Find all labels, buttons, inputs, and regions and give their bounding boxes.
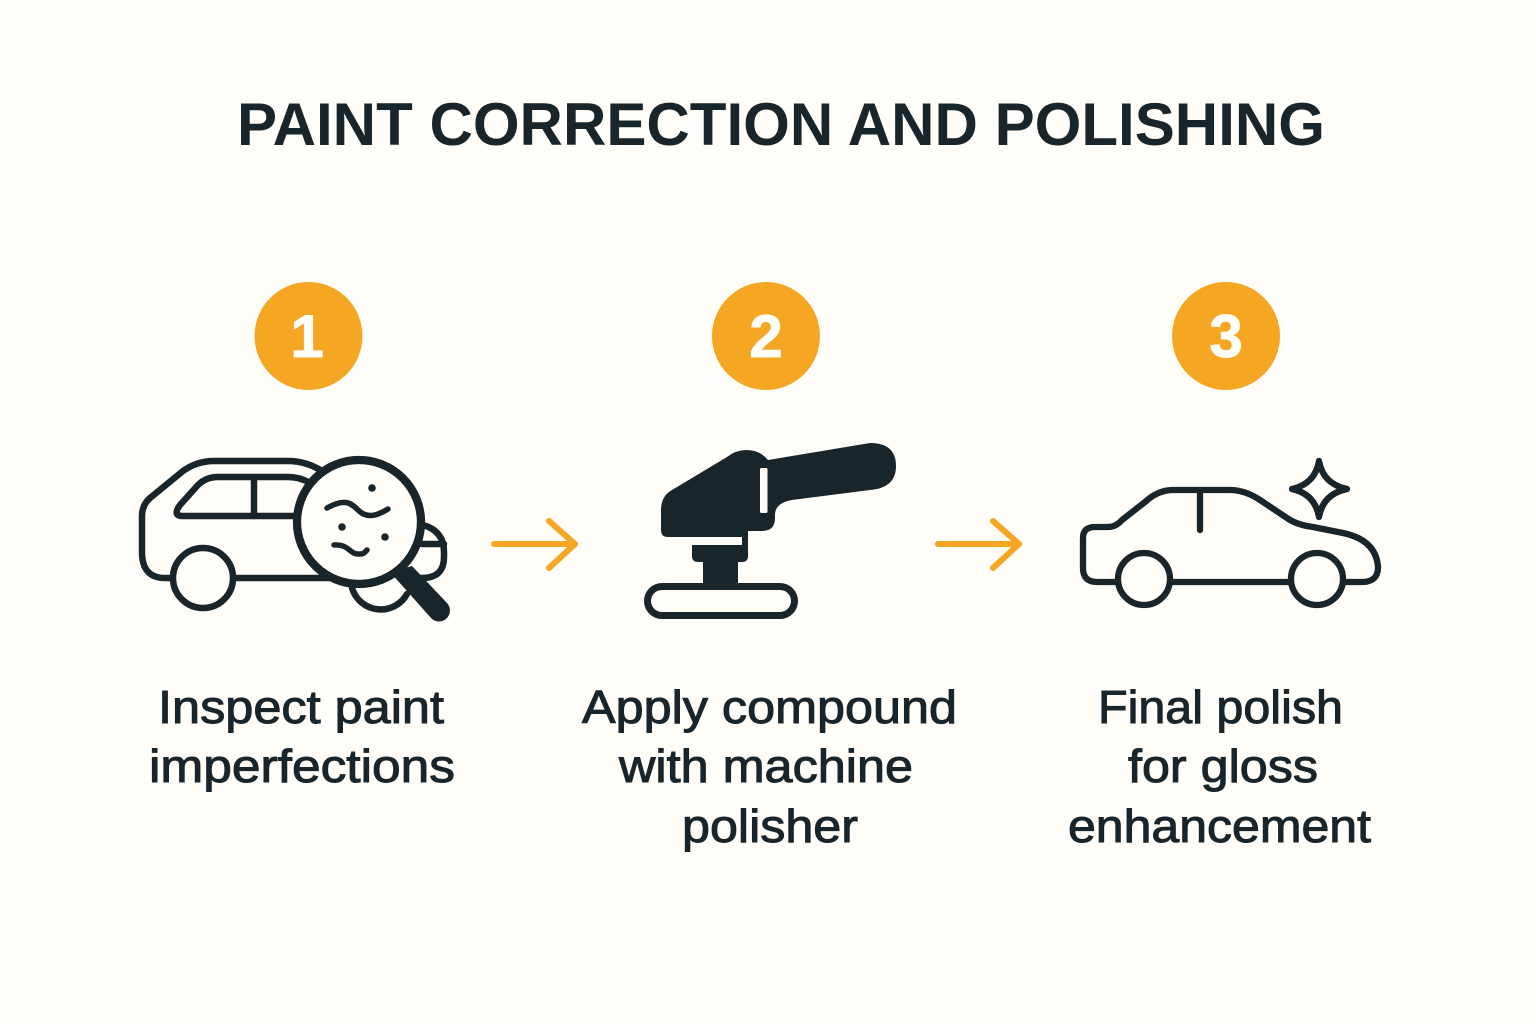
step 1 caption: Inspect paint	[158, 681, 444, 733]
step 2 caption: polisher	[682, 800, 858, 852]
step 1 caption	[149, 681, 455, 792]
step 2 caption	[582, 681, 957, 852]
step 2 number badge: 2	[749, 303, 783, 370]
arrow: step 2 to step 3	[938, 521, 1019, 568]
magnifying glass	[297, 460, 450, 621]
step 1 number badge	[254, 282, 362, 390]
sparkle	[1292, 461, 1347, 517]
step 3 number badge: 3	[1209, 303, 1243, 370]
step 3 caption: enhancement	[1068, 800, 1371, 852]
step 3 caption: Final polish	[1098, 681, 1343, 733]
step 3 caption	[1068, 681, 1371, 852]
step 1 caption: imperfections	[149, 740, 455, 792]
arrow: step 1 to step 2	[494, 521, 575, 568]
step 2 number badge	[712, 282, 820, 390]
step 3 caption: for gloss	[1128, 740, 1318, 792]
step 1 number badge: 1	[290, 303, 324, 370]
icon: shiny car with sparkle	[1083, 461, 1378, 605]
step 3 number badge	[1172, 282, 1280, 390]
step 2 caption: with machine	[618, 740, 913, 792]
title: PAINT CORRECTION AND POLISHING	[237, 91, 1325, 158]
icon: car under magnifying glass	[142, 460, 450, 621]
icon: machine polisher	[648, 443, 896, 616]
step 2 caption: Apply compound	[582, 681, 957, 733]
